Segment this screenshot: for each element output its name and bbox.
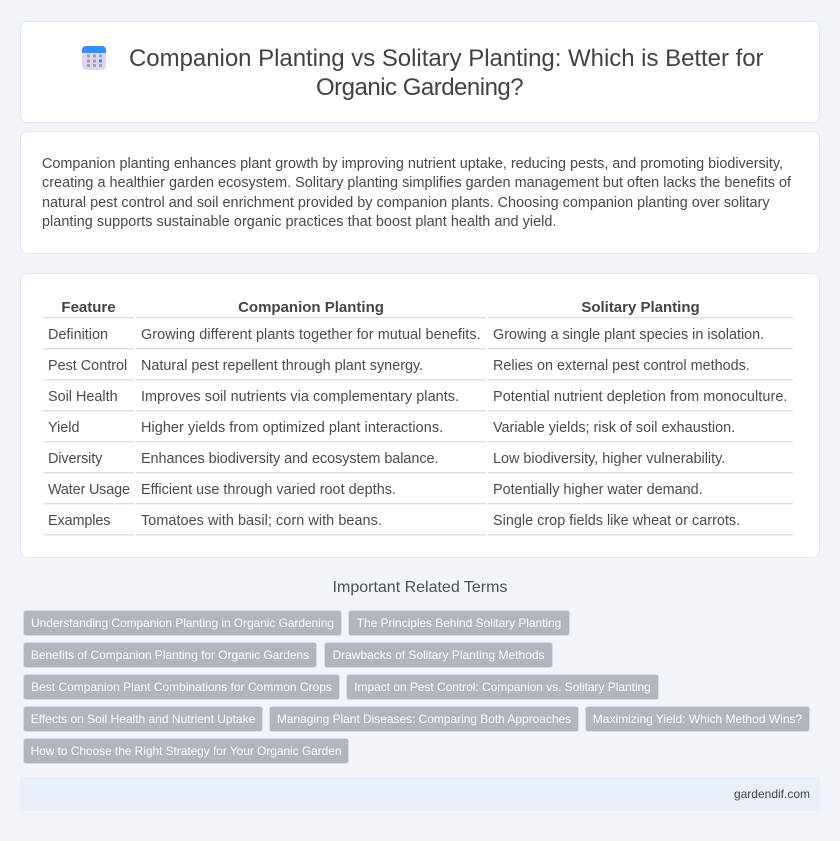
row: Diversity: Diversity — [48, 451, 102, 467]
row: Soil Health: Soil Health — [48, 389, 118, 405]
row: Definition: Growing different plants together for mutual benefits. — [141, 327, 481, 343]
tag: Effects on Soil Health and Nutrient Uptake — [31, 712, 255, 726]
row: Yield: Variable yields; risk of soil exhaustion. — [493, 420, 735, 436]
row: Pest Control: Natural pest repellent through plant synergy. — [141, 358, 423, 374]
row: Water Usage — [48, 482, 703, 498]
row: Diversity: Low biodiversity, higher vulnerability. — [493, 451, 725, 467]
heading: Important Related Terms: Important Related Terms — [333, 579, 507, 596]
row: Diversity — [48, 451, 725, 467]
footer bar — [20, 777, 820, 811]
row: Examples: Single crop fields like wheat or carrots. — [493, 513, 740, 529]
panel: introduction — [20, 131, 820, 254]
row: Water Usage: Efficient use through varied root depths. — [141, 482, 396, 498]
tag — [348, 610, 570, 636]
panel: comparison table — [20, 273, 820, 558]
tag: Best Companion Plant Combinations for Common Crops — [31, 680, 332, 694]
row: Diversity: Enhances biodiversity and ecosystem balance. — [141, 451, 438, 467]
tag — [23, 610, 342, 636]
row: Definition — [48, 327, 764, 343]
row: Yield — [48, 420, 735, 436]
row: Yield: Higher yields from optimized plant interactions. — [141, 420, 443, 436]
title — [129, 45, 764, 101]
row: Water Usage: Water Usage — [48, 482, 130, 498]
row: Examples — [48, 513, 740, 529]
tag: Maximizing Yield: Which Method Wins? — [593, 712, 802, 726]
row: Soil Health: Potential nutrient depletion from monoculture. — [493, 389, 788, 405]
row: Pest Control — [48, 358, 750, 374]
tag: The Principles Behind Solitary Planting — [357, 616, 561, 630]
row: Yield: Yield — [48, 420, 79, 436]
tag — [324, 642, 553, 668]
tag: Drawbacks of Solitary Planting Methods — [332, 648, 545, 662]
tag — [23, 706, 263, 732]
tag — [346, 674, 659, 700]
comparison table — [43, 299, 793, 536]
tag — [23, 674, 340, 700]
text block: introduction: planting supports sustainable organic practices that boost plant health and yield. — [42, 214, 556, 230]
text block: introduction: natural pest control and soil enrichment provided by companion plants. Choosing companion planting over solitary — [42, 195, 770, 211]
row: Soil Health — [48, 389, 788, 405]
tag: Benefits of Companion Planting for Organic Gardens — [31, 648, 309, 662]
row: Examples: Tomatoes with basil; corn with beans. — [141, 513, 382, 529]
row: Pest Control: Relies on external pest control methods. — [493, 358, 750, 374]
row: Definition: Growing a single plant species in isolation. — [493, 327, 764, 343]
text block: introduction: Companion planting enhances plant growth by improving nutrient uptake, reducing pests, and promoting biodiversity, — [42, 156, 783, 172]
row: Examples: Examples — [48, 513, 110, 529]
footer: source: gardendif.com — [734, 787, 810, 801]
row: Pest Control: Pest Control — [48, 358, 127, 374]
title: Organic Gardening? — [316, 74, 523, 101]
tag: How to Choose the Right Strategy for Your Organic Garden — [31, 744, 341, 758]
tag: Impact on Pest Control: Companion vs. Solitary Planting — [354, 680, 651, 694]
tag: Understanding Companion Planting in Organic Gardening — [31, 616, 334, 630]
tag — [585, 706, 810, 732]
row: Definition: Definition — [48, 327, 108, 343]
text block: introduction — [42, 156, 792, 230]
table header: Feature: Feature — [61, 299, 116, 316]
tag — [269, 706, 579, 732]
tag — [23, 738, 349, 764]
table header: Solitary Planting: Solitary Planting — [581, 299, 700, 316]
row: Soil Health: Improves soil nutrients via complementary plants. — [141, 389, 459, 405]
title: Companion Planting vs Solitary Planting: Which is Better for — [129, 45, 764, 72]
icon: calendar — [82, 46, 106, 70]
tag — [23, 642, 317, 668]
text block: introduction: creating a healthier garden ecosystem. Solitary planting simplifies garden management but often lacks the benefits of — [42, 175, 791, 191]
row: Water Usage: Potentially higher water demand. — [493, 482, 703, 498]
tag cloud — [23, 610, 810, 764]
tag: Managing Plant Diseases: Comparing Both Approaches — [277, 712, 571, 726]
table header: Companion Planting: Companion Planting — [238, 299, 384, 316]
panel: header — [20, 21, 820, 123]
